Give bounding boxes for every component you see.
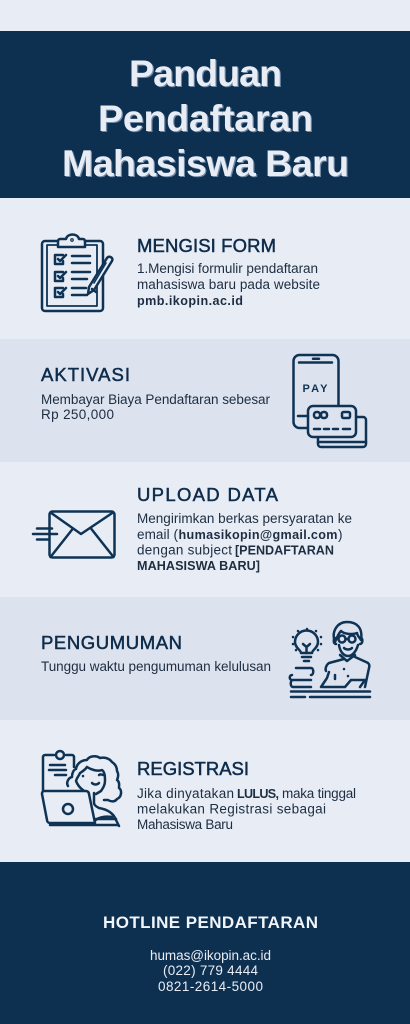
panel: step 5 registrasi [42,751,356,832]
panel: step 2 aktivasi [41,355,366,447]
heading: PENGUMUMAN [41,632,182,653]
contact details: 0821-2614-5000 [158,979,263,994]
text block: Jika dinyatakan [137,786,234,801]
heading: AKTIVASI [41,364,130,385]
text block: dengan subject [137,542,232,558]
text block: pmb.ikopin.ac.id [137,294,243,308]
heading: MENGISI FORM [137,235,276,256]
text block: humasikopin@gmail.com [178,528,338,542]
text block: mahasiswa baru pada website [137,277,320,292]
text block: Mahasiswa Baru [137,817,233,832]
text block: Tunggu waktu pengumuman kelulusan [41,659,271,674]
title: Pendaftaran [98,97,313,139]
panel: step 4 pengumuman [41,622,370,697]
text block [137,511,352,573]
text block: email ( [137,527,178,542]
title: Pendaftaran [99,98,314,140]
heading: hotline: HOTLINE PENDAFTARAN [103,913,318,932]
panel: footer hotline [0,862,410,1024]
text block: Membayar Biaya Pendaftaran sebesar [41,392,270,407]
text block: melakukan Registrasi sebagai [137,802,326,816]
text block: MAHASISWA BARU] [137,559,260,573]
icon: woman with laptop and document [42,751,121,826]
text block [137,786,356,832]
panel: header [0,31,410,198]
text block: ) [338,527,342,542]
text block: Rp 250,000 [41,407,114,422]
title: Panduan [129,52,282,94]
text block: Mengirimkan berkas persyaratan ke [137,511,352,526]
panel: step 2 band [0,339,410,462]
contact details: (022) 779 4444 [163,963,258,978]
panel: step 1 mengisi form [42,234,320,311]
title: Mahasiswa Baru [63,143,350,185]
text block [137,261,320,308]
heading: UPLOAD DATA [137,484,279,505]
text block: 1.Mengisi formulir pendaftaran [137,261,318,276]
icon: phone pay with cards: PAY [302,383,328,395]
text block: LULUS, [237,787,279,801]
icon: phone pay with cards [294,355,366,447]
text block: maka tinggal [282,786,356,801]
icon: student at desk with light bulb [290,622,370,697]
heading: REGISTRASI [137,758,249,779]
title [62,52,350,185]
icon: clipboard with checklist and pencil [42,234,112,311]
contact details [150,948,271,994]
text block [41,392,270,422]
panel: step 3 upload data [33,484,352,573]
panel: step 4 band [0,597,410,720]
title: Panduan [130,53,283,95]
title: Mahasiswa Baru [62,142,349,184]
text block: [PENDAFTARAN [235,544,334,558]
contact details: humas@ikopin.ac.id [150,948,271,963]
icon: envelope [33,512,114,558]
